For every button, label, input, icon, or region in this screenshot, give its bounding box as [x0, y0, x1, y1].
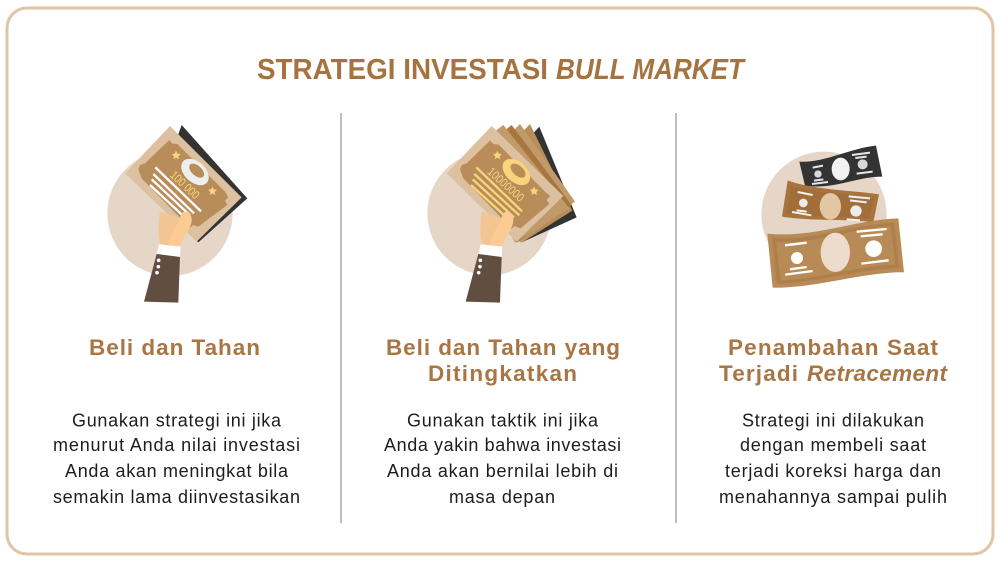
heading: Penambahan Saat Terjadi Retracement: [719, 335, 948, 386]
text block: column 2: Anda yakin bahwa investasi: [384, 435, 621, 455]
heading: Penambahan Saat Terjadi Retracement: Terjadi: [719, 361, 798, 386]
text block: column 3: [719, 410, 947, 507]
heading: Penambahan Saat Terjadi Retracement: Penambahan Saat: [728, 335, 938, 360]
heading: Beli dan Tahan yang Ditingkatkan: [386, 335, 620, 386]
text block: column 2: masa depan: [449, 487, 555, 507]
icon: hand holding one banknote: [107, 125, 247, 303]
text block: column 3: Strategi ini dilakukan: [742, 410, 924, 430]
heading: Beli dan Tahan: Beli dan Tahan: [89, 335, 260, 360]
text block: column 3: dengan membeli saat: [740, 435, 926, 455]
text block: column 1: [53, 410, 300, 507]
heading: Beli dan Tahan yang Ditingkatkan: Ditingkatkan: [428, 361, 577, 386]
text block: column 3: menahannya sampai pulih: [719, 487, 947, 507]
heading: Penambahan Saat Terjadi Retracement: Retracement: [807, 361, 948, 386]
text block: column 2: [384, 410, 621, 507]
text block: column 1: menurut Anda nilai investasi: [53, 435, 300, 455]
icon: three wavy banknotes: [761, 146, 904, 288]
heading: Beli dan Tahan yang Ditingkatkan: Beli dan Tahan yang: [386, 335, 620, 360]
text block: column 2: Gunakan taktik ini jika: [407, 410, 599, 430]
title: BULL MARKET: [556, 54, 746, 86]
icon: hand holding one banknote: 100 000: [167, 168, 203, 202]
text block: column 1: Gunakan strategi ini jika: [72, 410, 282, 430]
icon: hand holding fan of banknotes: 10000000: [485, 164, 527, 205]
title: [257, 54, 746, 86]
icon: hand holding fan of banknotes: [427, 124, 577, 303]
text block: column 1: Anda akan meningkat bila: [65, 461, 289, 481]
text block: column 1: semakin lama diinvestasikan: [53, 487, 300, 507]
text block: column 2: Anda akan bernilai lebih di: [387, 461, 618, 481]
text block: column 3: terjadi koreksi harga dan: [725, 461, 941, 481]
title: STRATEGI INVESTASI: [257, 54, 548, 86]
